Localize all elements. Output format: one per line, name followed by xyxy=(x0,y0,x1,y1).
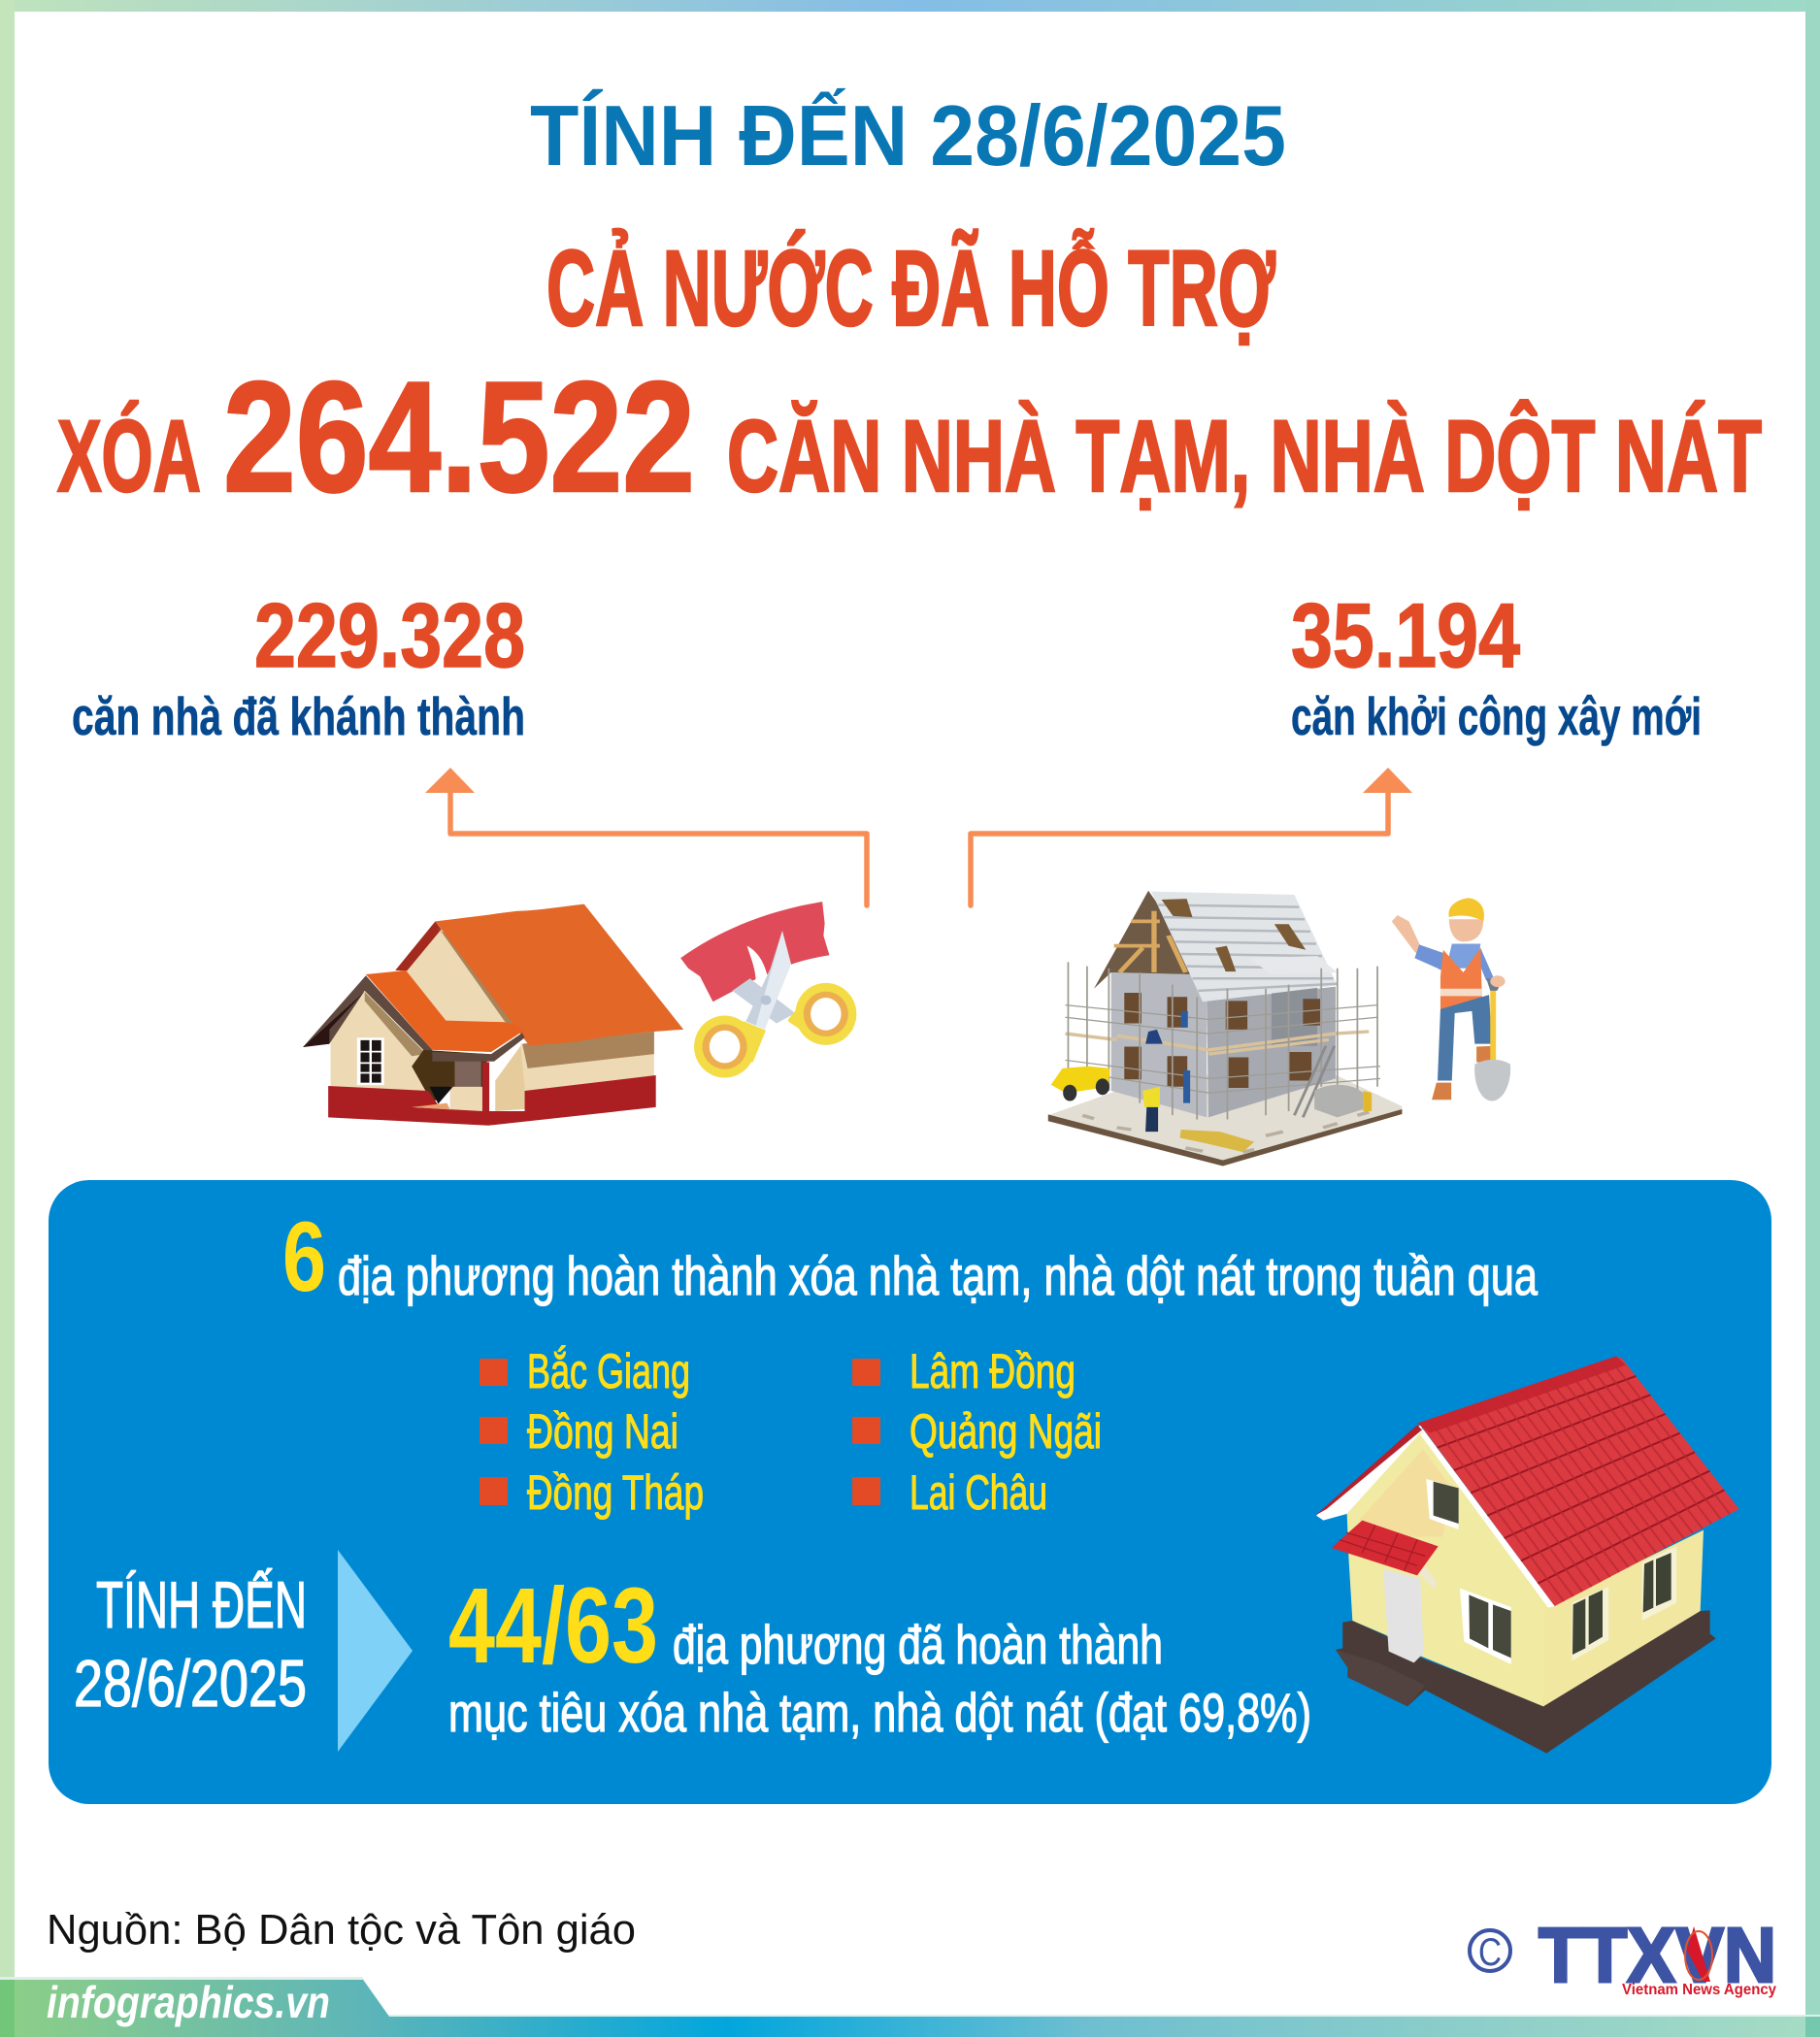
stat: completed houses xyxy=(72,584,525,746)
stat: new construction: 35.194 xyxy=(1291,584,1520,686)
list: localities left: Đồng Nai xyxy=(527,1404,678,1459)
logo: TTXVN: Vietnam News Agency xyxy=(1622,1982,1776,1998)
list: localities left: Đồng Tháp xyxy=(527,1465,704,1520)
footer site name: infographics.vn xyxy=(47,1977,330,2027)
title date: TÍNH ĐẾN 28/6/2025 xyxy=(530,87,1286,183)
source line: Nguồn: Bộ Dân tộc và Tôn giáo xyxy=(47,1906,636,1954)
icon: house under construction xyxy=(1048,891,1402,1166)
date label xyxy=(74,1567,307,1721)
logo: TTXVN: C xyxy=(1478,1931,1502,1974)
icon: ribbon and scissors xyxy=(680,902,856,1078)
panel: local progress xyxy=(49,1180,1771,1804)
arrow left xyxy=(425,768,867,905)
headline line 2: XÓA xyxy=(57,400,201,513)
arrow: date pointer xyxy=(338,1550,413,1752)
list: localities right: Quảng Ngãi xyxy=(910,1404,1102,1459)
icon: orange roof house xyxy=(303,904,683,1126)
logo: TTXVN: TTXVN xyxy=(1539,1912,1776,1998)
stat: completed houses: căn nhà đã khánh thành xyxy=(72,686,525,746)
icon: construction worker xyxy=(1392,898,1510,1101)
stat: new construction xyxy=(1291,584,1702,746)
stat text: địa phương đã hoàn thành xyxy=(673,1614,1163,1675)
list: localities left: Bắc Giang xyxy=(527,1344,690,1398)
list: localities right: Lâm Đồng xyxy=(910,1344,1075,1398)
icon: red roof house xyxy=(1315,1356,1739,1754)
stat: completed houses: 229.328 xyxy=(254,584,525,686)
big number 6: 6 xyxy=(282,1201,326,1312)
footer band xyxy=(0,1977,1820,2037)
list: localities left xyxy=(480,1344,704,1520)
arrow right xyxy=(971,768,1412,905)
stat text xyxy=(448,1614,1311,1743)
date label: TÍNH ĐẾN xyxy=(96,1567,307,1642)
stat: 44/63: 44/63 xyxy=(448,1566,658,1686)
list: localities right xyxy=(852,1344,1102,1520)
headline line 1: CẢ NƯỚC ĐÃ HỖ TRỢ xyxy=(546,229,1275,348)
list: localities right: Lai Châu xyxy=(910,1465,1047,1520)
stat text: mục tiêu xóa nhà tạm, nhà dột nát (đạt 69,8%) xyxy=(448,1682,1311,1743)
headline line 2 xyxy=(57,349,1762,525)
headline line 2: 264.522 xyxy=(223,349,695,525)
date label: 28/6/2025 xyxy=(74,1647,307,1721)
